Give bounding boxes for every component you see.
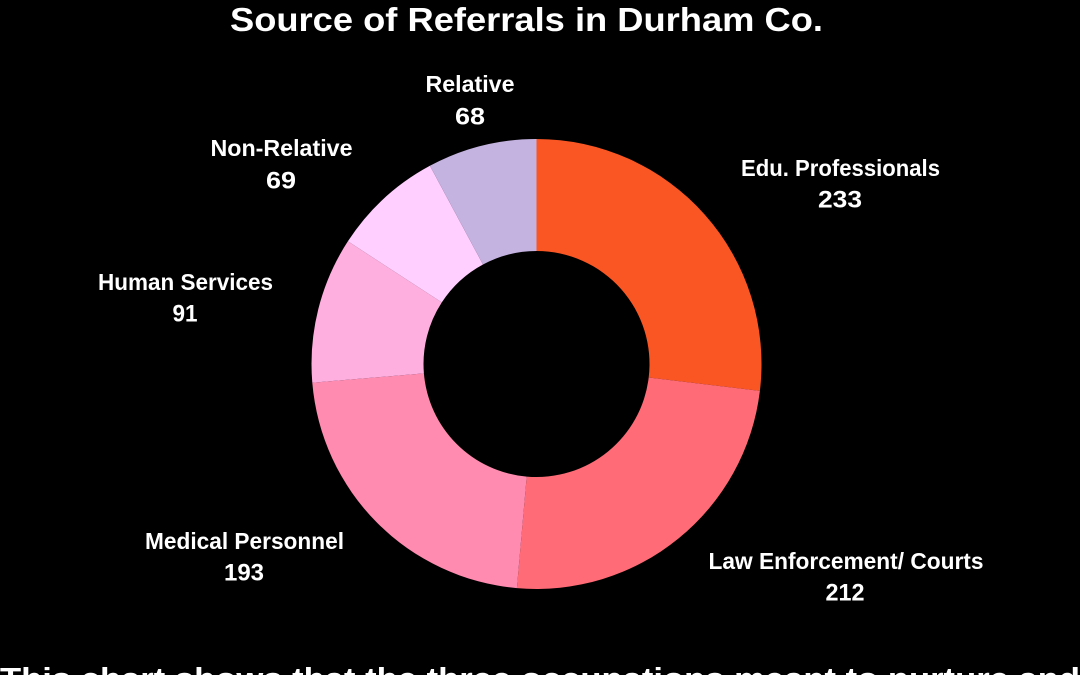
slice: Relative bbox=[430, 139, 536, 264]
donut chart bbox=[312, 139, 762, 589]
label: Law Enforcement/ Courts: 212 bbox=[826, 580, 864, 606]
slice: Medical Personnel bbox=[312, 373, 527, 588]
label: Medical Personnel: 193 bbox=[224, 560, 264, 586]
label: Non-Relative: 69 bbox=[266, 168, 296, 194]
label: Non-Relative bbox=[210, 135, 352, 194]
label: Relative bbox=[426, 71, 514, 130]
slice: Edu. Professionals bbox=[536, 139, 762, 391]
label: Non-Relative: Non-Relative bbox=[210, 135, 352, 161]
label: Law Enforcement/ Courts bbox=[708, 548, 984, 606]
label: Human Services: Human Services bbox=[98, 269, 273, 295]
label: Medical Personnel: Medical Personnel bbox=[145, 528, 344, 554]
label: Relative: 68 bbox=[455, 104, 485, 130]
label: Law Enforcement/ Courts: Law Enforcement/ Courts bbox=[708, 548, 984, 574]
label: Relative: Relative bbox=[426, 71, 514, 97]
label: Human Services bbox=[98, 269, 273, 328]
label: Medical Personnel bbox=[145, 528, 344, 586]
label: Human Services: 91 bbox=[172, 300, 198, 328]
label: Edu. Professionals bbox=[741, 155, 940, 214]
title: Source of Referrals in Durham Co. bbox=[230, 1, 823, 38]
label: Edu. Professionals: 233 bbox=[818, 186, 862, 214]
slice: Non-Relative bbox=[348, 166, 483, 302]
slice: Law Enforcement/ Courts bbox=[517, 378, 760, 589]
label: Edu. Professionals: Edu. Professionals bbox=[741, 155, 940, 181]
slice: Human Services bbox=[312, 241, 442, 383]
